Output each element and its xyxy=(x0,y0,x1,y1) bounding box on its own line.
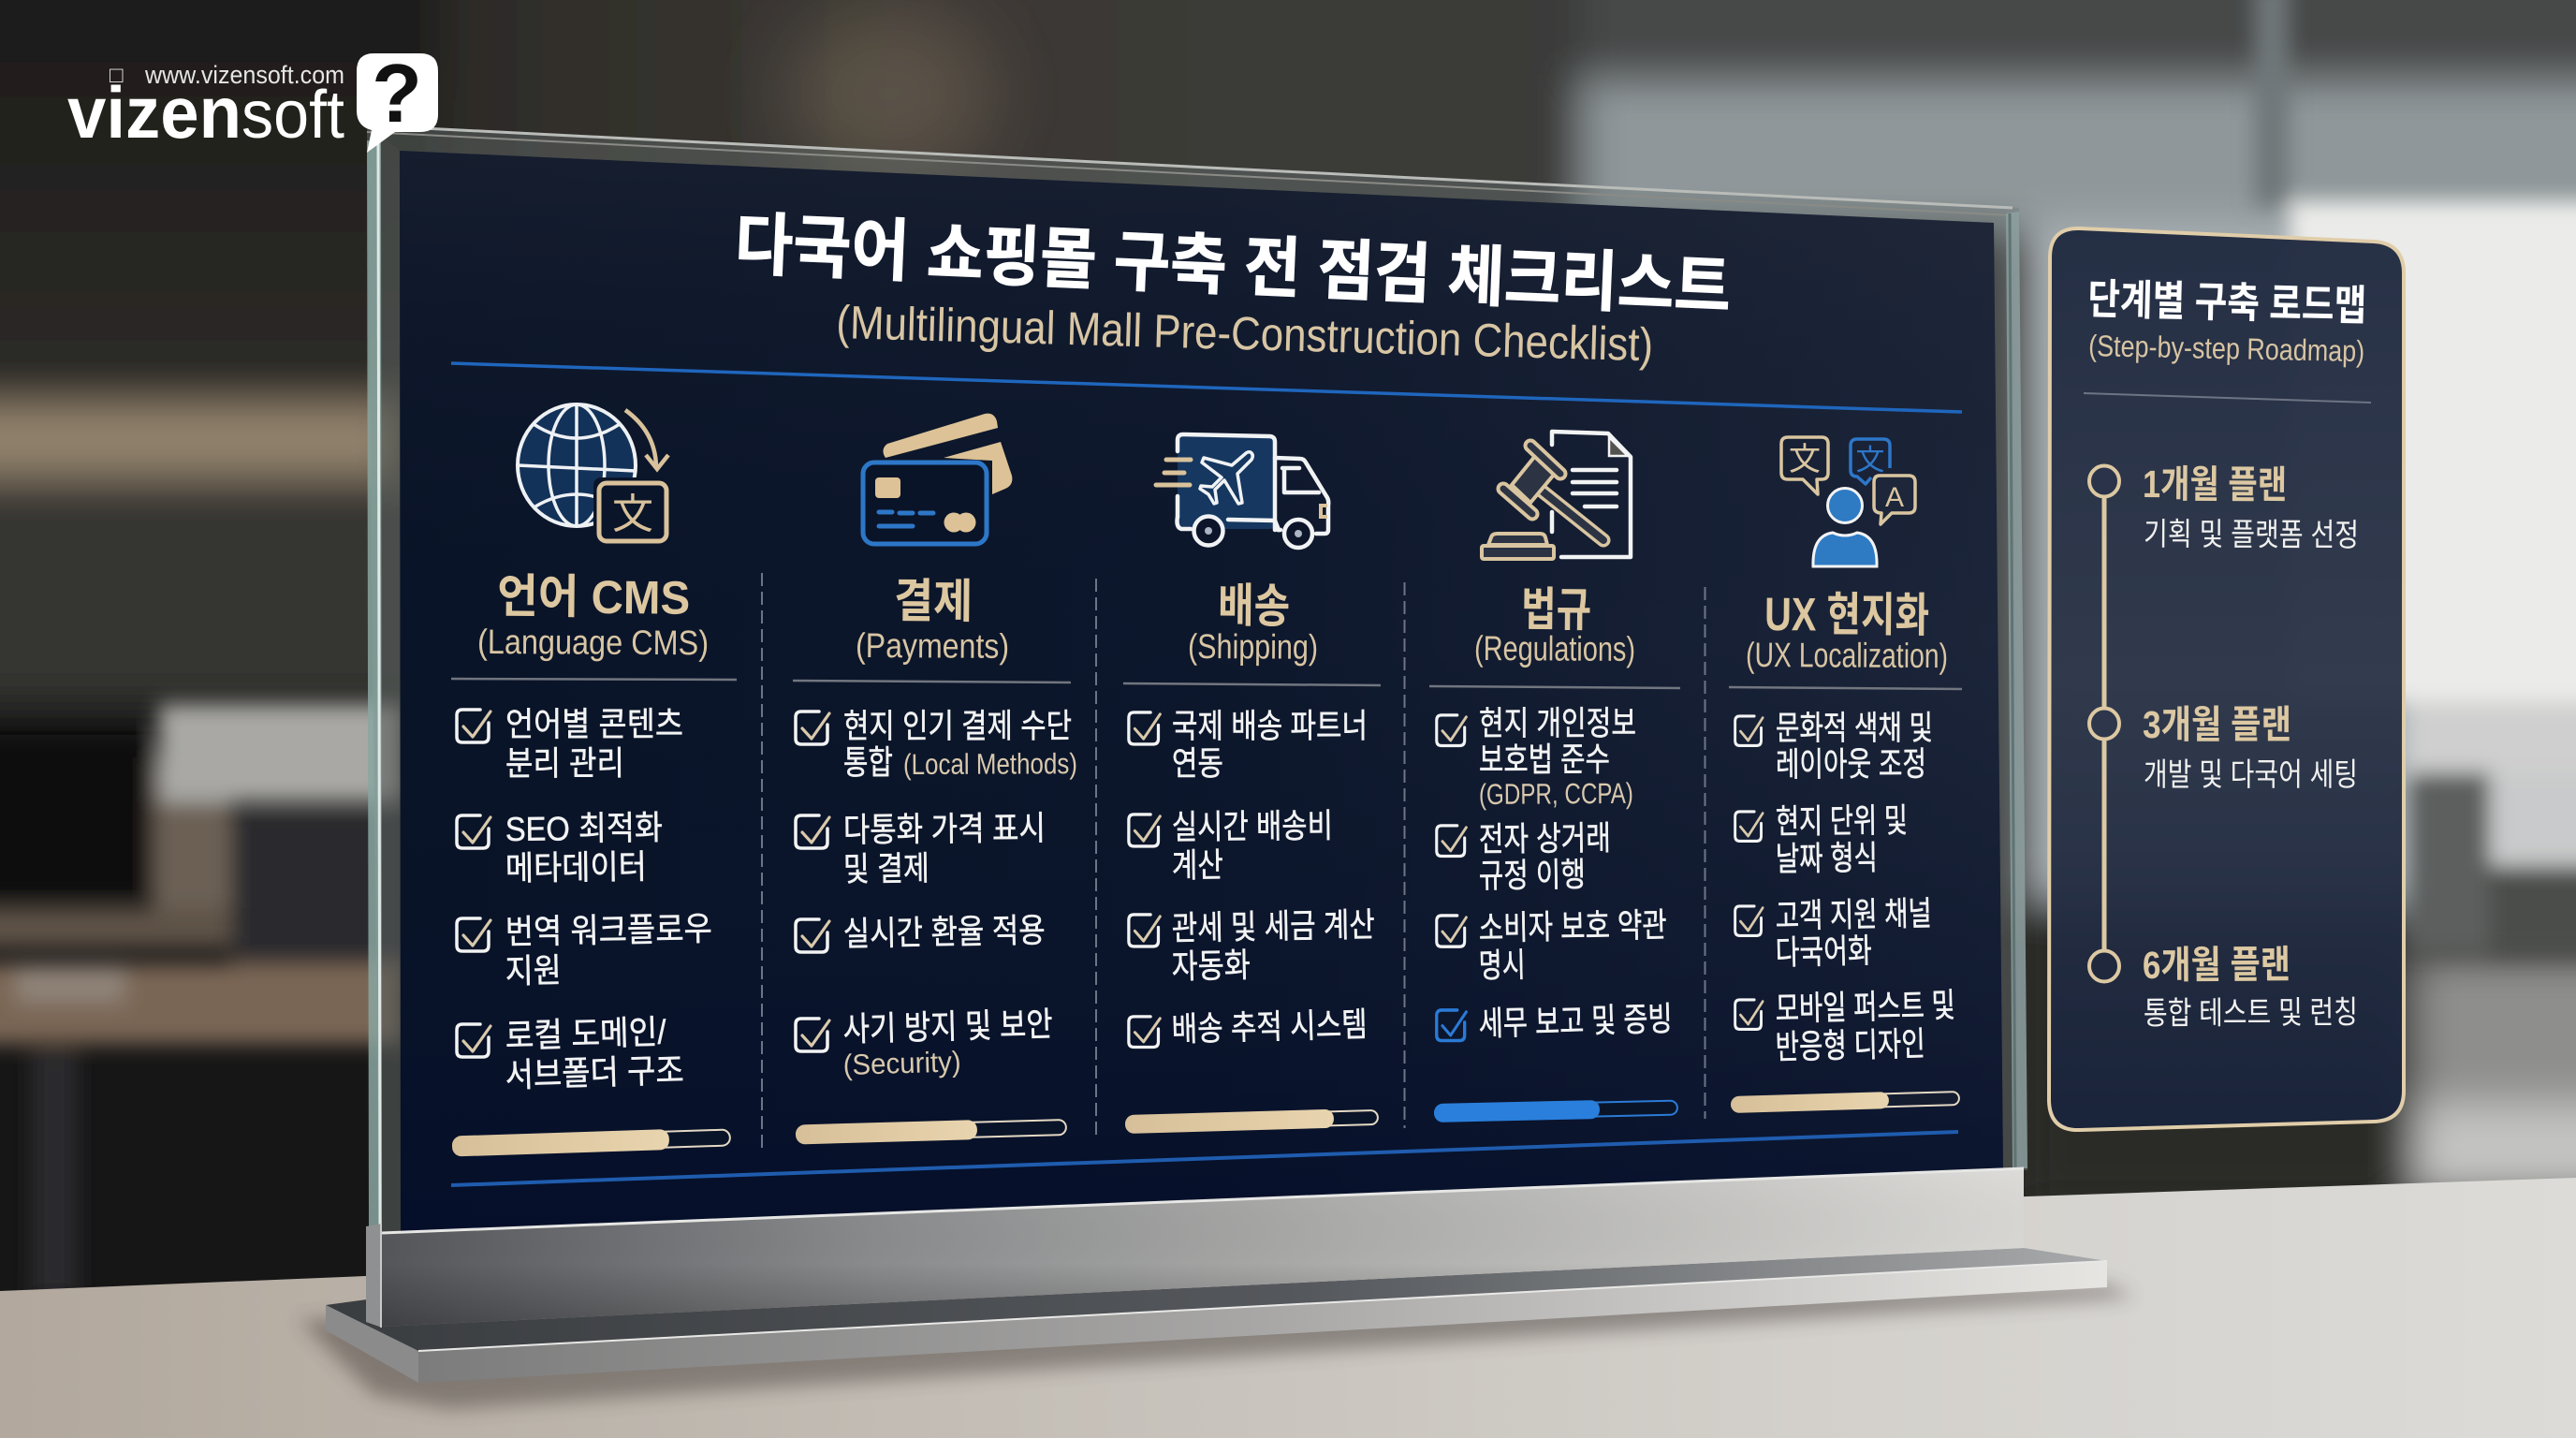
checklist item: 전자 상거래 xyxy=(1479,818,1611,858)
checklist item: 규정 이행 xyxy=(1479,855,1586,895)
logo: vizensoft: □ xyxy=(110,63,124,88)
icon: person with speech bubbles xyxy=(1781,433,1915,566)
logo: vizensoft xyxy=(67,47,438,154)
checklist item: (GDPR, CCPA) xyxy=(1479,777,1633,811)
timeline xyxy=(2089,466,2119,981)
step: 6 months xyxy=(2143,943,2358,1032)
icon: globe with translation xyxy=(518,404,671,545)
checklist item: 실시간 배송비 xyxy=(1172,806,1333,846)
checklist item: 다국어화 xyxy=(1775,932,1872,972)
checklist item xyxy=(1437,999,1673,1043)
roadmap subheading: (Step-by-step Roadmap) xyxy=(2088,329,2365,368)
subheading: (Language CMS) xyxy=(477,623,709,662)
checklist item: 및 결제 xyxy=(843,849,929,888)
tabletop xyxy=(0,1178,2576,1438)
checklist item: 날짜 형식 xyxy=(1776,839,1878,878)
checklist item: 다통화 가격 표시 xyxy=(843,809,1046,849)
heading: 배송 xyxy=(1218,580,1290,633)
step: 1 month: 1개월 플랜 xyxy=(2143,462,2287,506)
subtitle: (Multilingual Mall Pre-Construction Checklist) xyxy=(836,296,1654,371)
checklist item xyxy=(457,1013,684,1094)
panel: UX Localization xyxy=(1729,433,1962,1113)
checklist item xyxy=(1735,709,1933,784)
checklist item xyxy=(1437,818,1611,895)
checklist item: 지원 xyxy=(505,951,562,990)
heading: 결제 xyxy=(894,575,973,628)
progress bar xyxy=(796,1118,1066,1144)
icon: credit cards xyxy=(863,414,1012,544)
panel: Payments xyxy=(793,414,1077,1144)
progress bar xyxy=(1434,1098,1677,1123)
checklist item xyxy=(1735,986,1955,1066)
subheading: (Shipping) xyxy=(1188,627,1318,667)
bottom rule xyxy=(451,1132,1958,1185)
checklist item xyxy=(1129,905,1375,986)
step: 6 months: 6개월 플랜 xyxy=(2143,943,2291,987)
checklist item: (Local Methods) xyxy=(903,747,1077,781)
roadmap heading: 단계별 구축 로드맵 xyxy=(2087,275,2367,330)
top rule xyxy=(451,363,1962,412)
checklist item: 세무 보고 및 증빙 xyxy=(1478,999,1673,1043)
checklist item: 번역 워크플로우 xyxy=(505,909,712,951)
icon: person with speech bubbles: A xyxy=(1885,482,1904,513)
step: 1 month: 기획 및 플랫폼 선정 xyxy=(2144,517,2359,553)
checklist item: 서브폴더 구조 xyxy=(505,1050,684,1094)
checklist item xyxy=(457,909,712,990)
panel: Language CMS xyxy=(451,404,737,1156)
logo: vizensoft: vizen xyxy=(67,71,242,154)
checklist item: (Security) xyxy=(842,1045,961,1081)
checklist item xyxy=(796,1005,1053,1081)
checklist item: 사기 방지 및 보안 xyxy=(842,1005,1053,1049)
logo: vizensoft: www.vizensoft.com xyxy=(144,61,344,89)
checklist item: SEO 최적화 xyxy=(505,808,663,848)
checklist item xyxy=(457,808,663,888)
checklist item: 분리 관리 xyxy=(505,743,624,783)
checklist item: 배송 추적 시스템 xyxy=(1171,1005,1368,1049)
checklist item xyxy=(1735,801,1908,878)
panel: roadmap xyxy=(2049,228,2404,1130)
checklist item: 모바일 퍼스트 및 xyxy=(1775,986,1955,1028)
progress bar xyxy=(1731,1090,1959,1113)
step: 1 month xyxy=(2143,462,2359,553)
checklist item: 현지 인기 결제 수단 xyxy=(843,707,1072,745)
heading: UX 현지화 xyxy=(1764,588,1929,642)
heading: 언어 CMS xyxy=(497,570,690,624)
step: 3 months xyxy=(2143,703,2358,793)
checklist item: 보호법 준수 xyxy=(1479,740,1610,779)
icon: globe with translation: 文 xyxy=(612,480,653,540)
checklist item xyxy=(1735,894,1932,972)
checklist item xyxy=(1129,806,1333,885)
checklist item: 명시 xyxy=(1478,946,1526,985)
step: 3 months: 3개월 플랜 xyxy=(2143,703,2291,746)
checklist item: 소비자 보호 약관 xyxy=(1478,905,1667,947)
checklist item: 국제 배송 파트너 xyxy=(1172,707,1368,745)
checklist item: 언어별 콘텐츠 xyxy=(505,705,683,743)
panel: Regulations xyxy=(1429,432,1680,1123)
step: 3 months: 개발 및 다국어 세팅 xyxy=(2144,757,2358,793)
display screen xyxy=(400,151,2003,1233)
progress bar xyxy=(1125,1108,1378,1134)
icon: person with speech bubbles: 文 xyxy=(1855,436,1885,478)
icon: person with speech bubbles: 文 xyxy=(1789,433,1821,479)
subheading: (UX Localization) xyxy=(1746,636,1948,675)
checklist item: 로컬 도메인/ xyxy=(505,1013,666,1055)
metal stand xyxy=(326,1168,2107,1383)
checklist item: 현지 단위 및 xyxy=(1776,801,1908,841)
checklist item: 연동 xyxy=(1172,744,1223,783)
checklist item: 자동화 xyxy=(1171,946,1251,986)
base shadow xyxy=(300,1284,2134,1409)
checklist item xyxy=(457,705,683,783)
checklist item: 통합 xyxy=(843,743,893,782)
logo: vizensoft: ? xyxy=(372,47,422,139)
checklist item xyxy=(796,707,1077,782)
checklist item: 실시간 환율 적용 xyxy=(842,911,1046,953)
glass pane xyxy=(367,125,2027,1238)
subheading: (Payments) xyxy=(856,626,1009,666)
step: 6 months: 통합 테스트 및 런칭 xyxy=(2144,995,2358,1032)
checklist item xyxy=(1437,905,1667,985)
progress bar xyxy=(452,1127,730,1156)
checklist item: 현지 개인정보 xyxy=(1479,704,1636,742)
panel: Shipping xyxy=(1123,434,1381,1134)
checklist item: 문화적 색채 및 xyxy=(1776,709,1933,747)
logo: vizensoft: soft xyxy=(242,78,344,153)
checklist item xyxy=(1129,1005,1368,1049)
checklist item: 반응형 디자인 xyxy=(1775,1024,1925,1066)
icon: delivery truck with plane xyxy=(1156,434,1328,548)
checklist item: 메타데이터 xyxy=(505,847,647,888)
heading: 법규 xyxy=(1521,583,1591,637)
subheading: (Regulations) xyxy=(1474,629,1635,668)
checklist item xyxy=(796,809,1046,888)
title: 다국어 쇼핑몰 구축 전 점검 체크리스트 xyxy=(733,207,1733,326)
checklist item: 관세 및 세금 계산 xyxy=(1171,905,1375,947)
checklist item: 레이아웃 조정 xyxy=(1776,744,1926,784)
checklist item xyxy=(1437,704,1636,811)
checklist item: 고객 지원 채널 xyxy=(1775,894,1932,935)
checklist item xyxy=(1129,707,1368,783)
icon: gavel and document xyxy=(1482,432,1631,559)
checklist item: 계산 xyxy=(1172,845,1223,885)
